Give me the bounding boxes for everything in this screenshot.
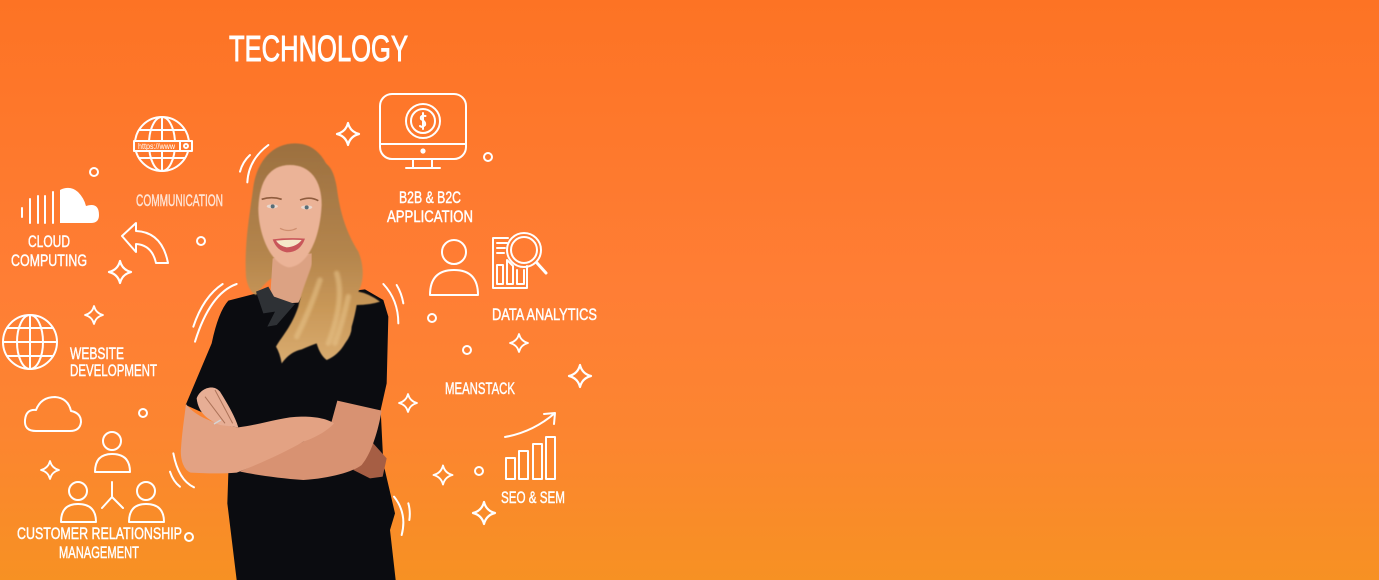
icon: outline cloud [25, 397, 81, 431]
icon: growth chart [505, 413, 555, 479]
icon: monitor with coin [380, 94, 466, 168]
black dress [186, 289, 396, 580]
icon: back arrow [122, 223, 168, 263]
person: woman with crossed arms [170, 143, 410, 580]
hair right side [276, 163, 380, 363]
label: meanstack: MEANSTACK [445, 379, 515, 398]
collar brooch [256, 287, 295, 327]
eyebrows and eyes [262, 198, 318, 209]
label: cloud computing: CLOUD [28, 232, 70, 251]
label: b2b and b2c application: B2B & B2C [399, 188, 461, 207]
left forearm [181, 404, 334, 473]
icon: website globe [3, 315, 57, 369]
icon: people network [61, 432, 164, 522]
neck [271, 253, 312, 304]
label: cloud computing: COMPUTING [11, 251, 87, 270]
icon: user [430, 240, 478, 295]
label: website development: WEBSITE [70, 344, 124, 363]
icon: solid cloud [22, 188, 99, 223]
title: TECHNOLOGY [229, 28, 408, 69]
label: customer relationship management: MANAGEMENT [59, 543, 139, 562]
icon: report with magnifier [493, 233, 546, 288]
nose shadow [280, 228, 297, 230]
label: customer relationship management: CUSTOMER RELATIONSHIP [17, 524, 182, 543]
hair back [246, 143, 337, 295]
sparkles [41, 123, 591, 524]
small circles [90, 153, 492, 541]
mouth [273, 238, 305, 252]
icon: communication globe: https://www [138, 142, 175, 151]
lower right hand [353, 442, 387, 478]
hair highlights [297, 273, 348, 343]
label: website development [70, 344, 157, 380]
label: customer relationship management [17, 524, 182, 562]
label: b2b and b2c application [387, 188, 473, 226]
label: cloud computing [11, 232, 87, 270]
icon: communication globe [134, 117, 192, 171]
right forearm [240, 401, 382, 480]
label: b2b and b2c application: APPLICATION [387, 207, 473, 226]
label: website development: DEVELOPMENT [70, 361, 157, 380]
ring [214, 420, 221, 424]
motion strokes [170, 145, 410, 535]
face [258, 165, 322, 267]
label: communication: COMMUNICATION [136, 191, 223, 210]
label: data analytics: DATA ANALYTICS [492, 305, 597, 324]
left hand fingers [197, 387, 238, 427]
label: seo and sem: SEO & SEM [501, 488, 565, 507]
